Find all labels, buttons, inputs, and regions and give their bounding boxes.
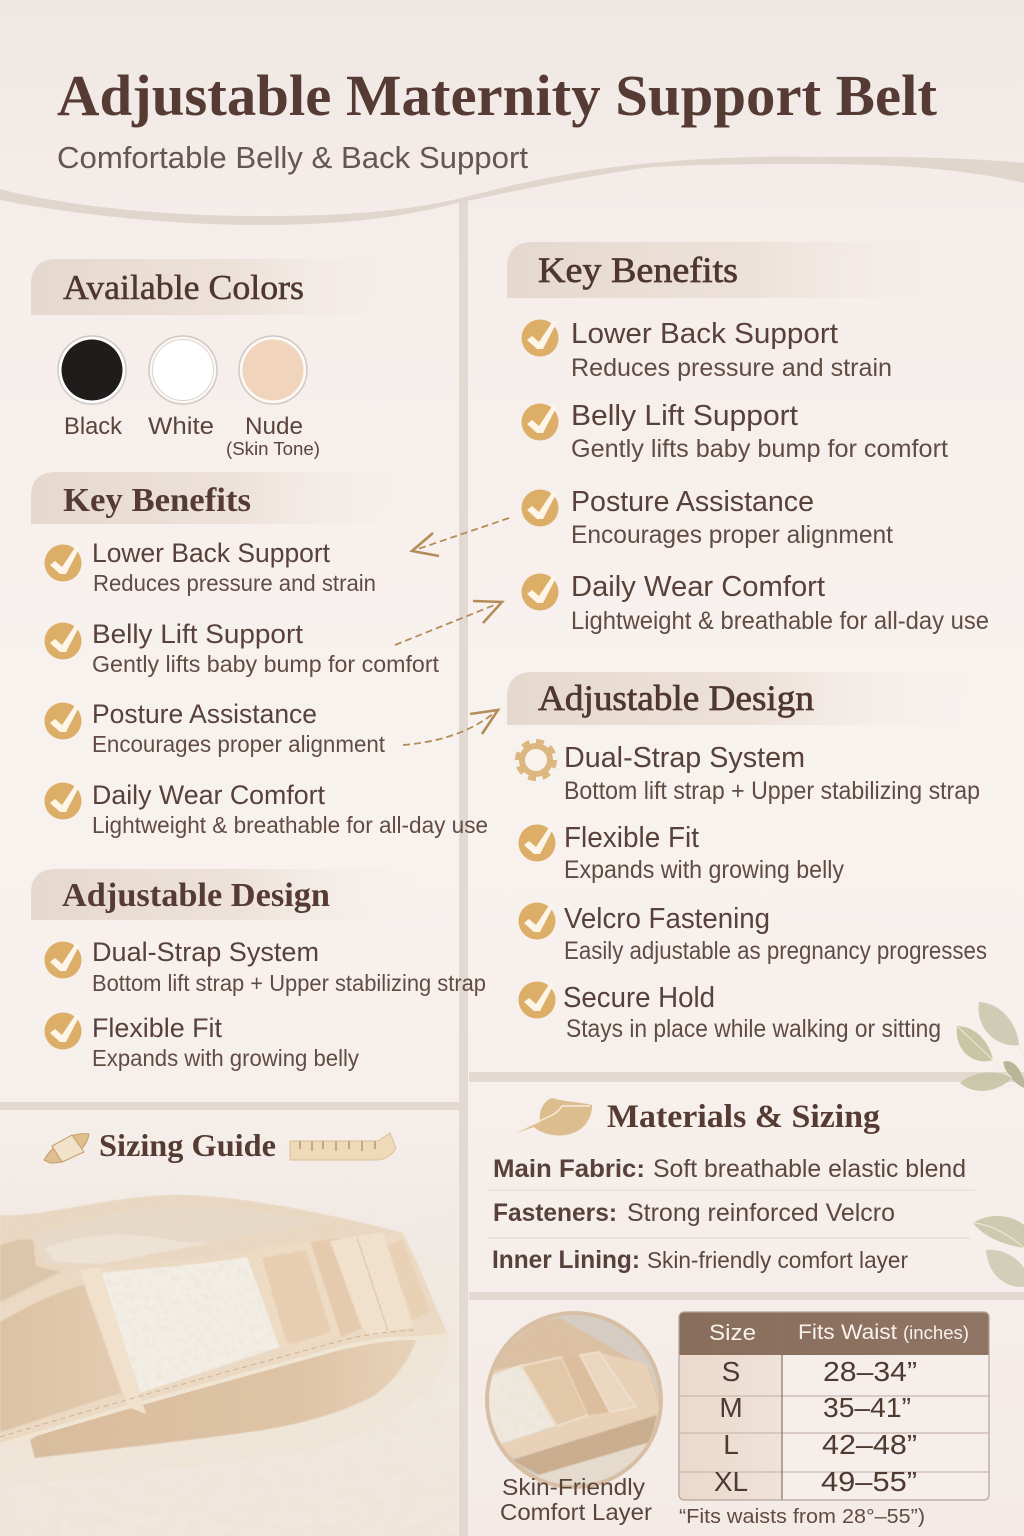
benefit: posture assistance: Posture Assistance	[92, 699, 317, 729]
panel: key benefits left	[31, 472, 488, 838]
row: M	[719, 1392, 911, 1423]
feature: velcro fastening	[518, 902, 987, 965]
benefit: posture assistance	[522, 486, 893, 549]
benefit: posture assistance: Posture Assistance	[571, 486, 814, 518]
benefit: daily wear comfort: Lightweight & breathable for all-day use	[571, 607, 989, 635]
arrow: posture to left column	[412, 518, 509, 556]
feature: flexible fit: Flexible Fit	[92, 1013, 222, 1043]
panel: sizing guide	[0, 1110, 458, 1536]
benefit: belly lift support	[44, 619, 440, 677]
row: L: L	[723, 1429, 739, 1460]
image: skin-friendly comfort layer	[484, 1310, 665, 1490]
heading: adjustable design	[507, 672, 1000, 725]
feature: dual-strap system: Bottom lift strap + Upper stabilizing strap	[564, 777, 980, 805]
row: S: 28–34”	[823, 1356, 917, 1387]
benefit: belly lift support: Belly Lift Support	[92, 619, 304, 649]
feature: flexible fit: Expands with growing belly	[564, 856, 844, 884]
heading: key benefits: Key Benefits	[63, 482, 251, 519]
benefit: daily wear comfort: Daily Wear Comfort	[571, 571, 825, 603]
feature: dual-strap system: Dual-Strap System	[564, 742, 805, 774]
swatch: nude	[226, 336, 320, 459]
decorative leaves lower	[973, 1216, 1024, 1287]
arrow: belly lift to right column	[395, 601, 502, 645]
table header: Size	[709, 1320, 756, 1345]
swatch: black	[58, 336, 126, 440]
heading: available colors	[31, 259, 440, 315]
icon: leaf	[516, 1098, 592, 1135]
icon: ruler	[290, 1133, 396, 1160]
feature: secure hold	[518, 982, 941, 1043]
row: S	[722, 1356, 917, 1387]
feature: dual-strap system	[518, 742, 980, 805]
spec: inner lining	[492, 1246, 908, 1274]
spec: inner lining: Skin-friendly comfort layer	[647, 1247, 908, 1273]
spec: fasteners: Strong reinforced Velcro	[627, 1199, 895, 1227]
row: XL: 49–55”	[821, 1466, 917, 1497]
table note: “Fits waists from 28°–55”)	[679, 1506, 925, 1528]
benefit: lower back support: Reduces pressure and strain	[93, 570, 376, 596]
benefit: daily wear comfort	[44, 780, 488, 838]
row: M: 35–41”	[823, 1392, 911, 1423]
feature: velcro fastening: Velcro Fastening	[564, 903, 770, 935]
benefit: lower back support	[44, 538, 376, 596]
benefit: belly lift support: Belly Lift Support	[571, 400, 798, 432]
heading: adjustable design: Adjustable Design	[538, 678, 814, 718]
feature: secure hold: Secure Hold	[563, 982, 715, 1014]
panel: key benefits right	[507, 242, 1000, 635]
benefit: daily wear comfort	[522, 571, 989, 635]
decorative leaves upper	[957, 1002, 1024, 1091]
heading: adjustable design: Adjustable Design	[62, 877, 330, 914]
subtitle: Comfortable Belly & Back Support	[57, 140, 528, 175]
arrow: posture to adjustable design	[403, 710, 498, 745]
spec: main fabric	[493, 1155, 966, 1183]
benefit: lower back support: Reduces pressure and strain	[571, 354, 892, 382]
swatch: nude: (Skin Tone)	[226, 439, 320, 459]
title: Adjustable Maternity Support Belt	[57, 63, 938, 128]
caption: skin-friendly comfort layer: Skin-Friendly	[502, 1474, 646, 1500]
row: S: S	[722, 1356, 740, 1387]
heading: adjustable design	[31, 869, 440, 920]
swatch: nude: Nude	[245, 413, 303, 440]
benefit: belly lift support: Gently lifts baby bump for comfort	[571, 435, 948, 463]
benefit: lower back support: Lower Back Support	[92, 538, 330, 568]
benefit: belly lift support: Gently lifts baby bump for comfort	[92, 651, 440, 677]
benefit: posture assistance: Encourages proper alignment	[571, 521, 893, 549]
panel: adjustable design right	[507, 672, 1000, 1043]
feature: flexible fit: Flexible Fit	[564, 822, 699, 854]
heading: available colors: Available Colors	[63, 268, 304, 307]
spec: main fabric: Main Fabric:	[493, 1155, 645, 1183]
icon: tape case	[44, 1134, 89, 1163]
benefit: posture assistance	[44, 699, 386, 757]
heading: key benefits	[507, 242, 1000, 298]
feature: dual-strap system	[44, 937, 486, 996]
benefit: belly lift support	[522, 400, 948, 463]
table header: (inches)	[903, 1323, 969, 1343]
heading: materials and sizing: Materials & Sizing	[607, 1099, 881, 1135]
feature: flexible fit: Expands with growing belly	[92, 1045, 359, 1071]
caption: skin-friendly comfort layer	[500, 1474, 652, 1525]
benefit: posture assistance: Encourages proper alignment	[92, 731, 386, 757]
panel: materials and sizing	[487, 1098, 975, 1274]
spec: fasteners	[493, 1199, 895, 1227]
row: L: 42–48”	[822, 1429, 917, 1460]
size table	[679, 1312, 989, 1500]
table header	[709, 1320, 969, 1345]
benefit: daily wear comfort: Lightweight & breathable for all-day use	[92, 812, 488, 838]
swatch: white	[148, 336, 217, 440]
caption: skin-friendly comfort layer: Comfort Layer	[500, 1499, 652, 1525]
benefit: lower back support: Lower Back Support	[571, 318, 838, 350]
benefit: daily wear comfort: Daily Wear Comfort	[92, 780, 325, 810]
row: M: M	[719, 1392, 743, 1423]
row: XL: XL	[714, 1466, 748, 1497]
row: XL	[714, 1466, 917, 1497]
feature: dual-strap system: Bottom lift strap + Upper stabilizing strap	[92, 970, 486, 996]
feature: flexible fit	[518, 822, 844, 884]
feature: dual-strap system: Dual-Strap System	[92, 937, 319, 967]
row: L	[723, 1429, 917, 1460]
panel: available colors	[31, 259, 440, 459]
swatch: white: White	[148, 413, 214, 440]
feature: flexible fit	[44, 1012, 359, 1071]
swatch: black: Black	[64, 413, 123, 440]
heading: sizing guide: Sizing Guide	[99, 1127, 276, 1163]
benefit: lower back support	[522, 318, 892, 382]
heading: key benefits	[31, 472, 440, 524]
feature: secure hold: Stays in place while walking or sitting	[566, 1015, 941, 1043]
panel: adjustable design left	[31, 869, 486, 1071]
spec: inner lining: Inner Lining:	[492, 1246, 640, 1274]
spec: fasteners: Fasteners:	[493, 1199, 617, 1227]
spec: main fabric: Soft breathable elastic blend	[653, 1155, 966, 1183]
heading: key benefits: Key Benefits	[538, 250, 738, 290]
belt on fleece photo	[0, 1194, 458, 1536]
table header: Fits Waist	[798, 1321, 897, 1344]
